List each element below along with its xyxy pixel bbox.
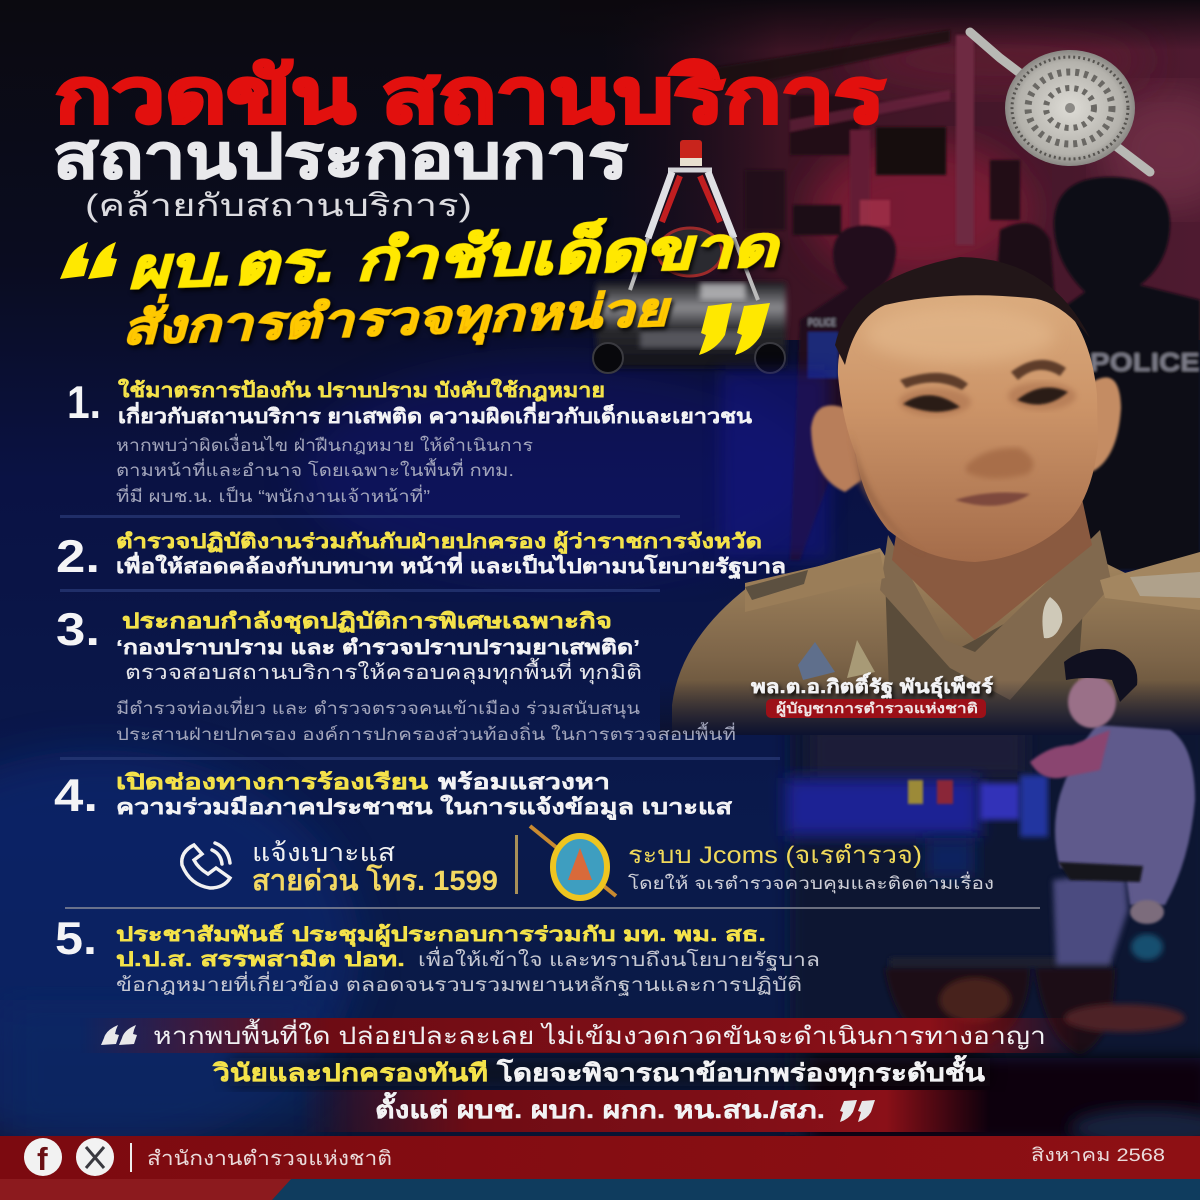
hand [1130, 900, 1164, 924]
item 5 purpose: เพื่อให้เข้าใจ และทราบถึงนโยบายรัฐบาล [418, 946, 820, 971]
number: 2. [56, 530, 100, 582]
neck [892, 480, 1092, 640]
title [53, 54, 885, 223]
line two: สั่งการตำรวจทุกหน่วย [120, 276, 673, 357]
head [838, 279, 1098, 562]
face [1068, 676, 1116, 728]
background photo: raid scene in maroon [700, 30, 1200, 570]
cap [1064, 649, 1137, 702]
icon: facebook: f [37, 1141, 48, 1177]
line one: หากพบพื้นที่ใด ปล่อยปละละเลย ไม่เข้มงวดกวดขันจะดำเนินการทางอาญา [153, 1018, 1046, 1050]
item 4 heading continued: พร้อมแสวงหา [438, 771, 610, 794]
item 1 details: หากพบว่าผิดเงื่อนไข ฝ่าฝืนกฎหมาย ให้ดำเนินการ [116, 433, 533, 455]
eye shadow sockets [899, 388, 971, 416]
mouth [955, 492, 1030, 506]
item 2 [56, 530, 786, 582]
item 2 subheading: เพื่อให้สอดคล้องกับบทบาท หน้าที่ และเป็นไปตามนโยบายรัฐบาล [116, 552, 786, 580]
quote headline [60, 212, 783, 357]
item 5 detail: ข้อกฎหมายที่เกี่ยวข้อง ตลอดจนรวบรวมพยานหลักฐานและการปฏิบัติ [116, 971, 802, 996]
trousers [1053, 872, 1128, 965]
panel: list background [720, 370, 830, 560]
icon: closing quote [699, 303, 770, 355]
icon: opening quote [101, 1025, 137, 1045]
item 1 heading: ใช้มาตรการป้องกัน ปราบปราม บังคับใช้กฎหมาย [118, 378, 605, 402]
item 3 details: มีตำรวจท่องเที่ยว และ ตำรวจตรวจคนเข้าเมือง ร่วมสนับสนุน [116, 696, 640, 719]
number: 5. [55, 912, 97, 964]
hotline number: สายด่วน โทร. 1599 [252, 864, 498, 896]
hair [835, 257, 1090, 365]
item 3 details [116, 696, 736, 744]
item 3 [56, 603, 736, 744]
icon: phone [182, 843, 230, 888]
icon: closing quote [840, 1100, 875, 1122]
eyebrows [900, 373, 968, 390]
Jcoms title: ระบบ Jcoms (จเรตำรวจ) [628, 842, 922, 869]
icon: inspector badge [530, 826, 616, 898]
line three: ตั้งแต่ ผบช. ผบก. ผกก. หน.สน./สภ. [375, 1092, 825, 1124]
icon: X [76, 1138, 114, 1176]
Jcoms description: โดยให้ จเรตำรวจควบคุมและติดตามเรื่อง [628, 871, 994, 894]
position pill [766, 699, 986, 718]
officer caption [751, 672, 994, 718]
icon: facebook [24, 1138, 62, 1177]
headline red: กวดขัน สถานบริการ [55, 54, 885, 139]
police label right: POLICE [1090, 347, 1200, 377]
line two highlight: วินัยและปกครองทันที [212, 1060, 488, 1087]
barricade and police car [593, 140, 786, 373]
item 4 [54, 769, 994, 898]
panel: lower right night scene [785, 715, 1200, 1148]
icon: baton emblem [970, 32, 1150, 172]
line two: โดยจะพิจารณาข้อบกพร่องทุกระดับชั้น [496, 1055, 986, 1088]
police officer right [1040, 177, 1200, 570]
body [1055, 725, 1195, 905]
item 1 details: ที่มี ผบช.น. เป็น “พนักงานเจ้าหน้าที่” [116, 484, 430, 506]
headline white: สถานประกอบการ [53, 123, 628, 192]
name: พล.ต.อ.กิตติ์รัฐ พันธุ์เพ็ชร์ [751, 672, 994, 699]
police label left: POLICE [808, 317, 836, 329]
item 5 [55, 912, 820, 996]
item 1 details [116, 433, 533, 506]
number: 4. [54, 769, 98, 821]
eye shadow right [1008, 382, 1076, 410]
ears [811, 405, 862, 492]
organisation name: สำนักงานตำรวจแห่งชาติ [147, 1148, 392, 1170]
item 4 subheading: ความร่วมมือภาคประชาชน ในการแจ้งข้อมูล เบาะแส [116, 794, 732, 820]
uniform [672, 548, 1200, 735]
item 1 details: ตามหน้าที่และอำนาจ โดยเฉพาะในพื้นที่ กทม. [116, 457, 514, 480]
number: 1. [67, 376, 101, 428]
item 3 subheading: ‘กองปราบปราม และ ตำรวจปราบปรามยาเสพติด’ [116, 637, 640, 659]
item 4 heading: เปิดช่องทางการร้องเรียน [116, 770, 429, 794]
item 3 line: ตรวจสอบสถานบริการให้ครอบคลุมทุกพื้นที่ ทุกมิติ [125, 657, 642, 685]
item 5 heading: ประชาสัมพันธ์ ประชุมผู้ประกอบการร่วมกับ มท. พม. สธ. [116, 923, 766, 947]
item 2 heading: ตำรวจปฏิบัติงานร่วมกันกับฝ่ายปกครอง ผู้ว่าราชการจังหวัด [116, 530, 762, 554]
number: 3. [56, 603, 100, 655]
closing quote block [80, 1018, 1080, 1132]
eyes [903, 395, 960, 412]
position pill: ผู้บัญชาการตำรวจแห่งชาติ [776, 700, 978, 717]
line one: ผบ.ตร. กำชับเด็ดขาด [126, 212, 783, 300]
item 5 agencies: ป.ป.ส. สรรพสามิต ปอท. [116, 949, 405, 971]
hotline label: แจ้งเบาะแส [252, 839, 395, 867]
cheek shadow [850, 430, 925, 555]
icon: opening quote [60, 242, 117, 279]
subtitle: (คล้ายกับสถานบริการ) [85, 188, 472, 223]
police officer left [790, 225, 896, 560]
police officer middle [995, 223, 1055, 330]
second officer photo [1030, 649, 1195, 965]
item 3 heading: ประกอบกำลังชุดปฏิบัติการพิเศษเฉพาะกิจ [122, 610, 612, 634]
item 3 details: ประสานฝ่ายปกครอง องค์การปกครองส่วนท้องถิ่น ในการตรวจสอบพื้นที่ [116, 721, 736, 744]
item 1 subheading: เกี่ยวกับสถานบริการ ยาเสพติด ความผิดเกี่ยวกับเด็กและเยาวชน [118, 402, 752, 428]
footer [0, 1136, 1200, 1200]
belt [1058, 862, 1143, 882]
arm and mic [1030, 730, 1110, 778]
forehead highlight [865, 307, 1055, 363]
item 1 [67, 376, 752, 506]
nose [966, 448, 1033, 479]
date: สิงหาคม 2568 [1031, 1145, 1165, 1165]
main portrait [672, 257, 1200, 735]
